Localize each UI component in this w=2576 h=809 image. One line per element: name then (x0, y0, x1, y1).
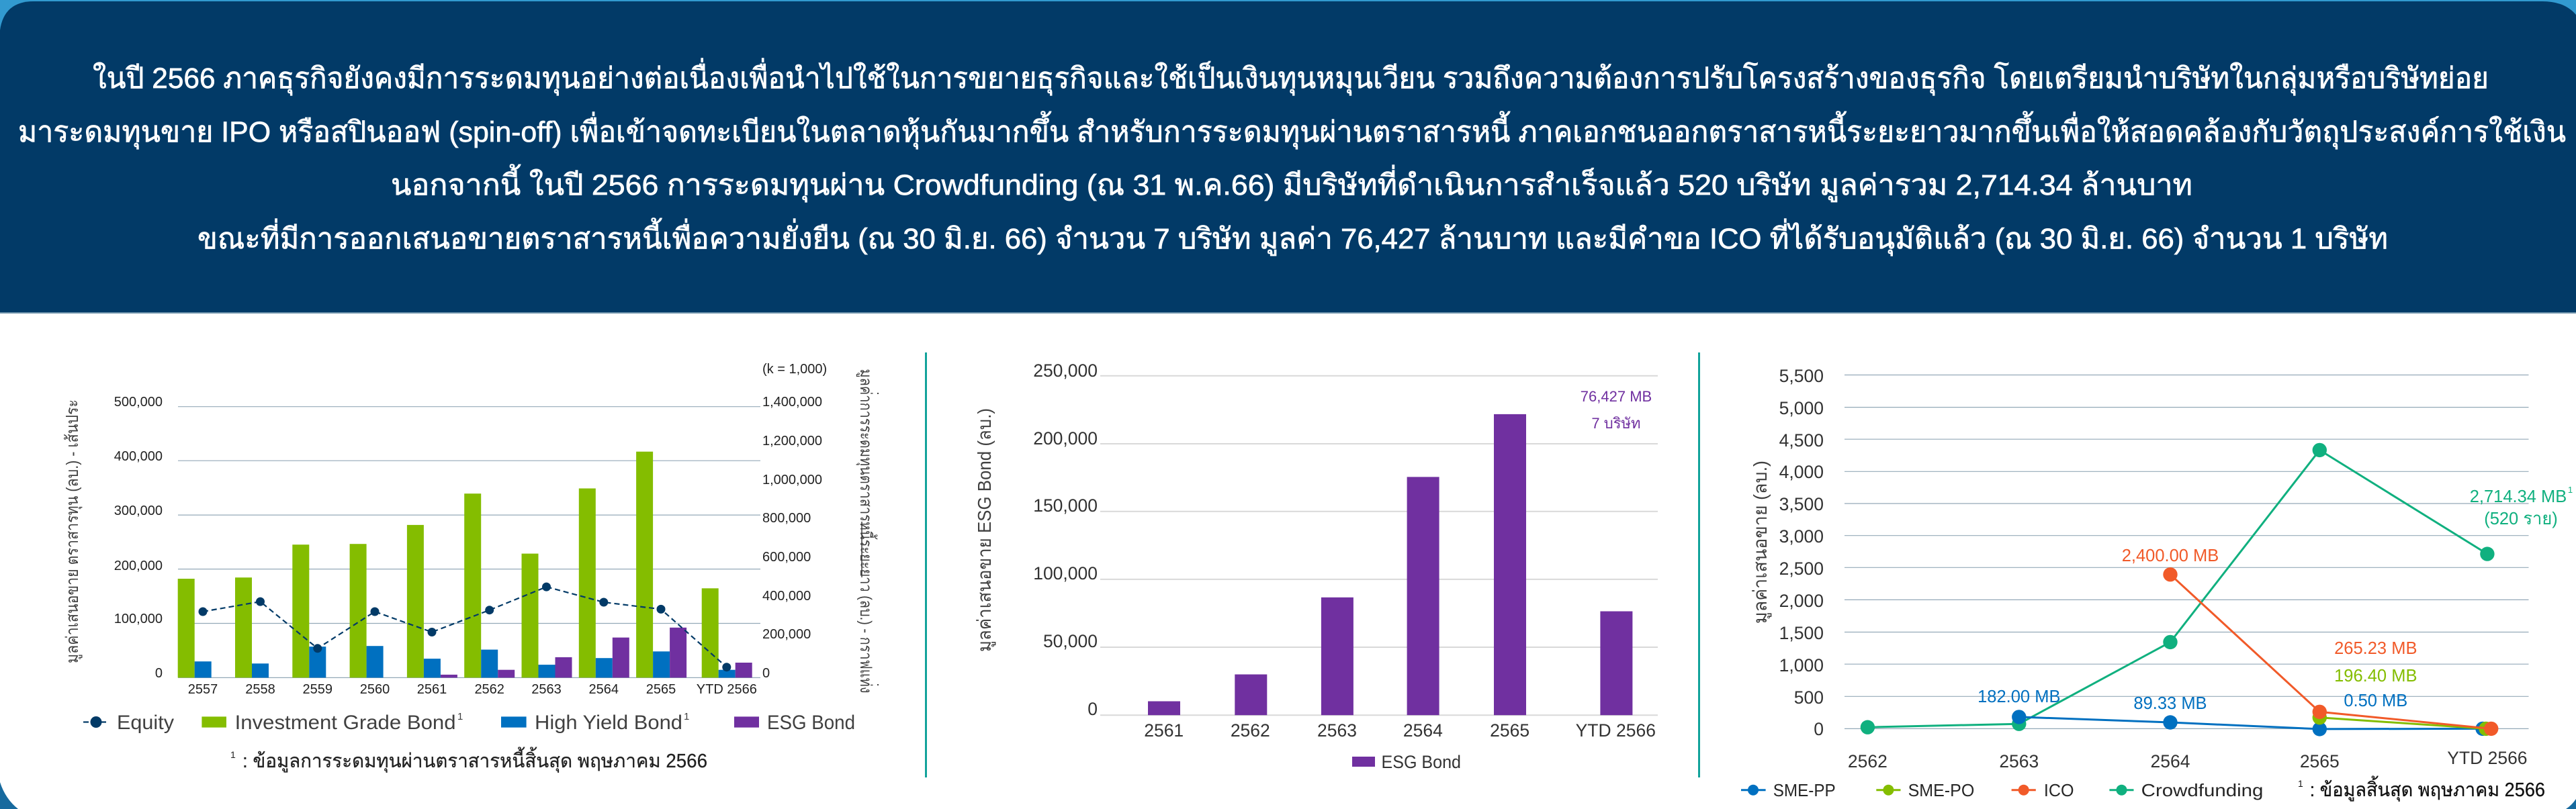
x axis labels: 2558 (245, 682, 275, 697)
panel: summary banner (0, 1, 2576, 314)
text block: banner summary (18, 58, 2566, 256)
legend: line chart (1741, 780, 2263, 800)
y axis labels: 50,000 (1043, 631, 1098, 651)
x axis labels: 2561 (1144, 720, 1184, 741)
left axis labels (114, 395, 163, 681)
bars: Investment Grade Bond (178, 452, 719, 677)
x axis labels: 2564 (1403, 720, 1443, 741)
bars: High Yield Bond (195, 646, 736, 677)
y axis labels (1779, 366, 1824, 739)
legend: line chart: ICO (2044, 780, 2074, 800)
right axis labels: 200,000 (762, 627, 811, 642)
text block: banner summary: ขณะที่มีการออกเสนอขายตราสารหนี้เพื่อความยั่งยืน (ณ 30 มิ.ย. 66) จำนวน 7 บริษัท มูลค่า 76,427 ล้านบาท และมีคำขอ ICO ที่ได้รับอนุมัติแล้ว (ณ 30 มิ.ย. 66) จำนวน 1 บริษัท (197, 218, 2388, 256)
legend: combo chart: Equity (117, 712, 174, 734)
y axis labels: 200,000 (1033, 428, 1098, 448)
callout: YTD ESG value (1581, 388, 1652, 432)
right axis labels: 0 (762, 666, 770, 681)
right axis labels (762, 395, 822, 681)
y axis labels: 3,000 (1779, 526, 1824, 546)
x axis labels: YTD 2566 (697, 682, 757, 697)
y axis labels: 0 (1087, 699, 1098, 719)
line: SME-PP (2012, 710, 2490, 736)
footnote: combo chart: : ข้อมูลการระดมทุนผ่านตราสารหนี้สิ้นสุด พฤษภาคม 2566 (242, 747, 707, 773)
divider: left (925, 352, 927, 777)
axis title: offer value: มูลค่าเสนอขาย (ลบ.) (1750, 461, 1772, 624)
x axis labels: 2565 (646, 682, 676, 697)
y axis labels: 500 (1794, 687, 1824, 708)
left axis labels: 200,000 (114, 559, 163, 573)
bars: ESG Bond by year (1148, 414, 1632, 715)
text block: banner summary: ในปี 2566 ภาคธุรกิจยังคงมีการระดมทุนอย่างต่อเนื่องเพื่อนำไปใช้ในการขยายธุรกิจและใช้เป็นเงินทุนหมุนเวียน รวมถึงความต้องการปรับโครงสร้างของธุรกิจ โดยเตรียมนำบริษัทในกลุ่มหรือบริษัทย่อย (93, 58, 2489, 96)
y axis labels: 4,500 (1779, 430, 1824, 450)
callout: YTD ESG value: 7 บริษัท (1591, 415, 1641, 432)
data labels (1978, 485, 2573, 713)
x axis labels: 2565 (1490, 720, 1529, 741)
panel: capital raising combo chart (63, 362, 879, 773)
text block: banner summary: มาระดมทุนขาย IPO หรือสปินออฟ (spin-off) เพื่อเข้าจดทะเบียนในตลาดหุ้นกันมากขึ้น สำหรับการระดมทุนผ่านตราสารหนี้ ภาคเอกชนออกตราสารหนี้ระยะยาวมากขึ้นเพื่อให้สอดคล้องกับวัตถุประสงค์การใช้เงิน (18, 111, 2566, 150)
data labels: 2,400.00 MB (2122, 546, 2219, 565)
data labels: 89.33 MB (2133, 694, 2207, 713)
x axis labels: 2561 (417, 682, 447, 697)
legend: line chart: SME-PP (1773, 780, 1836, 800)
x axis labels: 2562 (474, 682, 504, 697)
x axis labels: 2560 (360, 682, 390, 697)
data labels: 0.50 MB (2344, 692, 2407, 710)
left axis labels: 500,000 (114, 395, 163, 410)
x axis labels: 2564 (589, 682, 619, 697)
y axis labels: 100,000 (1033, 563, 1098, 583)
y axis labels: 5,500 (1779, 366, 1824, 386)
divider: right (1698, 352, 1700, 777)
y axis labels: 0 (1814, 719, 1824, 739)
x axis labels (1848, 748, 2528, 771)
text block: banner summary: นอกจากนี้ ในปี 2566 การระดมทุนผ่าน Crowdfunding (ณ 31 พ.ค.66) มีบริษัทที่ดำเนินการสำเร็จแล้ว 520 บริษัท มูลค่ารวม 2,714.34 ล้านบาท (391, 164, 2192, 203)
panel: alternative fundraising line chart (1741, 366, 2573, 802)
y axis labels: 150,000 (1033, 495, 1098, 516)
right axis labels: 800,000 (762, 511, 811, 526)
x axis labels: 2564 (2151, 751, 2190, 771)
line: SME-PO (2313, 710, 2493, 736)
line: Crowdfunding (1861, 443, 2495, 734)
right axis labels: 1,000,000 (762, 473, 822, 487)
x axis labels: 2557 (188, 682, 218, 697)
y axis labels: 2,500 (1779, 559, 1824, 579)
y axis labels: 5,000 (1779, 398, 1824, 418)
data labels: 265.23 MB (2334, 639, 2417, 658)
y axis labels: 250,000 (1033, 361, 1098, 381)
callout: YTD ESG value: 76,427 MB (1581, 388, 1652, 405)
axis title: right: มูลค่าการระดมทุนตราสารหนี้ระยะยาว (ลบ.) - กราฟแท่ง (856, 369, 878, 693)
y axis labels: 1,000 (1779, 655, 1824, 675)
y axis labels: 1,500 (1779, 623, 1824, 643)
x axis labels: YTD 2566 (2447, 748, 2528, 768)
left axis labels: 100,000 (114, 612, 163, 626)
x axis labels (188, 682, 757, 697)
axis title: left: มูลค่าเสนอขาย ตราสารทุน (ลบ.) - เส้นประ (63, 399, 83, 663)
bars: ESG Bond (441, 628, 752, 677)
data labels: 1 (2568, 485, 2573, 495)
legend: ESG Bond: ESG Bond (1381, 752, 1461, 772)
legend: line chart: Crowdfunding (2141, 780, 2263, 800)
x axis labels: 2559 (303, 682, 332, 697)
left axis labels: 300,000 (114, 504, 163, 518)
y axis labels (1033, 361, 1098, 719)
x axis labels: 2562 (1231, 720, 1270, 741)
x axis labels: 2562 (1848, 751, 1887, 771)
legend: line chart: SME-PO (1908, 780, 1974, 800)
x axis labels (1144, 720, 1656, 741)
footnote: line chart: : ข้อมูลสิ้นสุด พฤษภาคม 2566 (2310, 775, 2545, 802)
line: ICO (2163, 567, 2498, 736)
axis title: ESG value: มูลค่าเสนอขาย ESG Bond (ลบ.) (974, 408, 996, 652)
data labels: (520 ราย) (2484, 510, 2558, 528)
data labels: 182.00 MB (1978, 687, 2060, 706)
left axis labels: 400,000 (114, 449, 163, 464)
x axis labels: 2563 (531, 682, 562, 697)
x axis labels: 2565 (2300, 751, 2340, 771)
legend: combo chart: 1 (684, 711, 689, 722)
data labels: 2,714.34 MB (2470, 487, 2567, 506)
legend: combo chart: 1 (457, 711, 463, 722)
right axis labels: 1,200,000 (762, 434, 822, 448)
legend: combo chart: ESG Bond (767, 712, 855, 734)
line: Equity (199, 583, 731, 671)
legend: combo chart: High Yield Bond (535, 712, 682, 734)
unit note: (k = 1,000) (762, 362, 827, 377)
right axis labels: 600,000 (762, 550, 811, 565)
left axis labels: 0 (155, 666, 163, 681)
panel: ESG Bond bar chart (974, 361, 1658, 772)
footnote: line chart: 1 (2298, 778, 2303, 789)
legend: combo chart: Investment Grade Bond (235, 712, 456, 734)
x axis labels: 2563 (1317, 720, 1357, 741)
right axis labels: 1,400,000 (762, 395, 822, 410)
y axis labels: 4,000 (1779, 462, 1824, 482)
x axis labels: YTD 2566 (1576, 720, 1656, 741)
y axis labels: 3,500 (1779, 494, 1824, 514)
data labels: 196.40 MB (2334, 667, 2417, 685)
footnote: combo chart: 1 (230, 749, 236, 760)
right axis labels: 400,000 (762, 589, 811, 604)
legend: combo chart (83, 711, 855, 734)
x axis labels: 2563 (1999, 751, 2039, 771)
y axis labels: 2,000 (1779, 591, 1824, 611)
